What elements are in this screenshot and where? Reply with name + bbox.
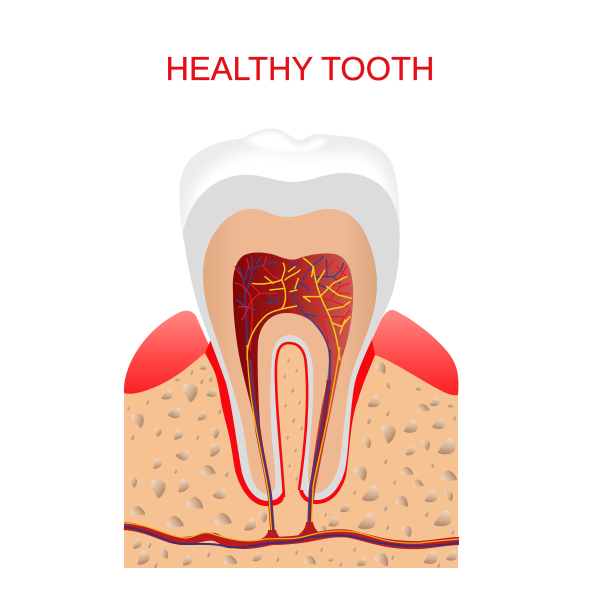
pulp chamber and canals — [233, 252, 353, 500]
blue veins — [237, 257, 343, 360]
bone pores — [126, 361, 459, 570]
blood vessels and nerves in pulp — [235, 257, 352, 360]
nerve flares at root bases — [256, 522, 330, 543]
nerve and vessel band along jaw — [124, 523, 459, 547]
title: HEALTHY TOOTH — [166, 51, 434, 88]
root canal nerve: left — [247, 345, 274, 538]
tooth: root tissue — [203, 209, 377, 494]
yellow nerves — [247, 258, 352, 360]
infographic: healthy tooth cross-section — [124, 56, 460, 568]
jaw bone — [124, 352, 459, 570]
gum: right — [368, 310, 458, 395]
bone between roots — [276, 343, 307, 497]
tooth: enamel crown — [179, 128, 400, 240]
tooth: dentin shell — [183, 173, 400, 501]
root canal nerve: right — [308, 347, 340, 537]
gum lining around roots — [205, 330, 375, 506]
gum: left — [124, 311, 212, 394]
red arteries — [235, 257, 350, 350]
